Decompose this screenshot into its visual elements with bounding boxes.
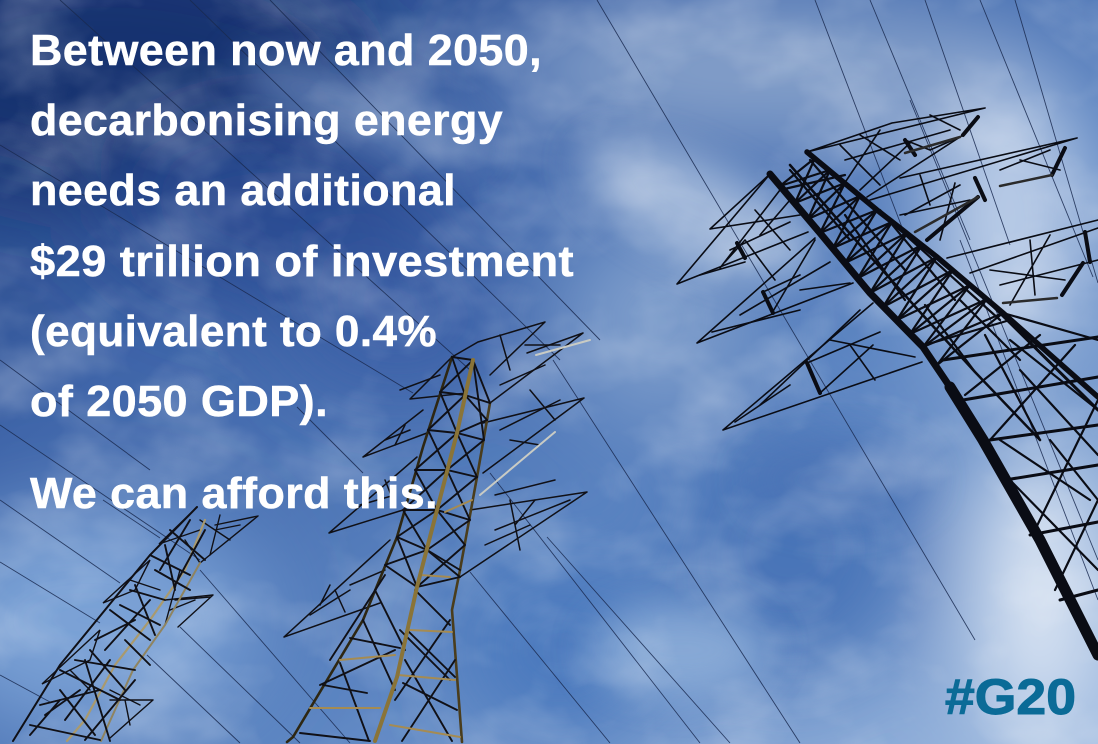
pylon: right	[677, 108, 1098, 655]
headline text	[30, 26, 574, 518]
pylon: centre	[284, 322, 590, 742]
headline text: of 2050 GDP).	[30, 377, 328, 426]
headline text: (equivalent to 0.4%	[30, 307, 437, 356]
mast lattice	[780, 158, 1098, 600]
headline text: $29 trillion of investment	[30, 237, 574, 286]
main mast legs	[770, 174, 950, 387]
hashtag: #G20	[945, 669, 1076, 725]
headline text: We can afford this.	[30, 469, 438, 518]
headline text: Between now and 2050,	[30, 26, 542, 75]
right arms	[807, 108, 1098, 305]
pylon: left	[13, 507, 258, 741]
left arms	[677, 174, 922, 430]
lattice	[300, 357, 490, 741]
headline text: needs an additional	[30, 166, 456, 215]
lattice	[30, 520, 205, 741]
headline text: decarbonising energy	[30, 96, 503, 145]
